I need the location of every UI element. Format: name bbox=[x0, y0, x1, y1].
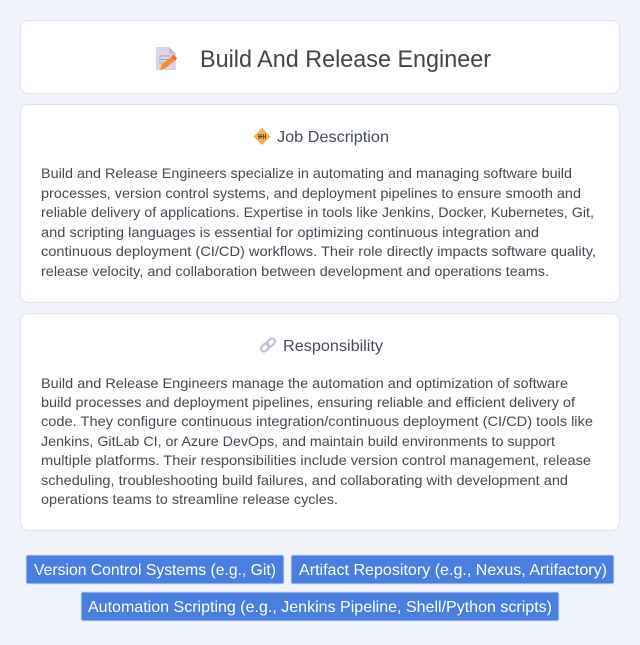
text block: responsibility: operations teams to streamline release cycles. bbox=[41, 491, 338, 507]
text block: job description: and scripting languages is essential for optimizing continuous integration and bbox=[41, 224, 539, 240]
icon: diamond sign bbox=[254, 128, 270, 145]
tag: automation scripting bbox=[81, 592, 559, 621]
text block: responsibility: scheduling, troubleshooting build failures, and collaborating with development and bbox=[41, 472, 568, 488]
text block: job description: reliable delivery of applications. Expertise in tools like Jenkins, Docker, Kubernetes, Git, bbox=[41, 204, 594, 220]
text block: job description: Build and Release Engineers specialize in automating and managing software build bbox=[41, 165, 572, 181]
panel: responsibility bbox=[20, 314, 620, 530]
heading: title: Build And Release Engineer bbox=[200, 46, 491, 73]
text block: job description: processes, version control systems, and deployment pipelines to ensure smooth and bbox=[41, 185, 581, 201]
text block: responsibility: build processes and deployment pipelines, ensuring reliable and efficient delivery of bbox=[41, 394, 575, 410]
icon: link bbox=[260, 337, 276, 353]
text block: responsibility: multiple platforms. Their responsibilities include version control management, release bbox=[41, 452, 591, 468]
text block: responsibility: Build and Release Engineers manage the automation and optimization of software bbox=[41, 375, 568, 391]
text block: job description: release velocity, and collaboration between development and operations teams. bbox=[41, 263, 549, 279]
text block: job description bbox=[41, 165, 596, 279]
text block: responsibility: code. They configure continuous integration/continuous deployment (CI/CD) tools like bbox=[41, 413, 593, 429]
heading: job description: Job Description bbox=[277, 129, 389, 146]
icon: document with pencil bbox=[156, 47, 177, 70]
tag: artifact repository bbox=[291, 555, 614, 584]
tag: version control systems bbox=[26, 555, 284, 584]
text block: responsibility bbox=[41, 375, 593, 507]
panel: job description bbox=[20, 104, 620, 302]
heading: responsibility: Responsibility bbox=[283, 338, 383, 355]
text block: responsibility: Jenkins, GitLab CI, or Azure DevOps, and maintain build environments to support bbox=[41, 433, 555, 449]
tag: automation scripting: Automation Scripting (e.g., Jenkins Pipeline, Shell/Python scripts) bbox=[88, 599, 552, 616]
tag: artifact repository: Artifact Repository (e.g., Nexus, Artifactory) bbox=[299, 562, 607, 579]
tag: version control systems: Version Control Systems (e.g., Git) bbox=[34, 562, 276, 579]
text block: job description: continuous deployment (CI/CD) workflows. Their role directly impacts software quality, bbox=[41, 243, 596, 259]
panel: title bbox=[20, 20, 620, 94]
